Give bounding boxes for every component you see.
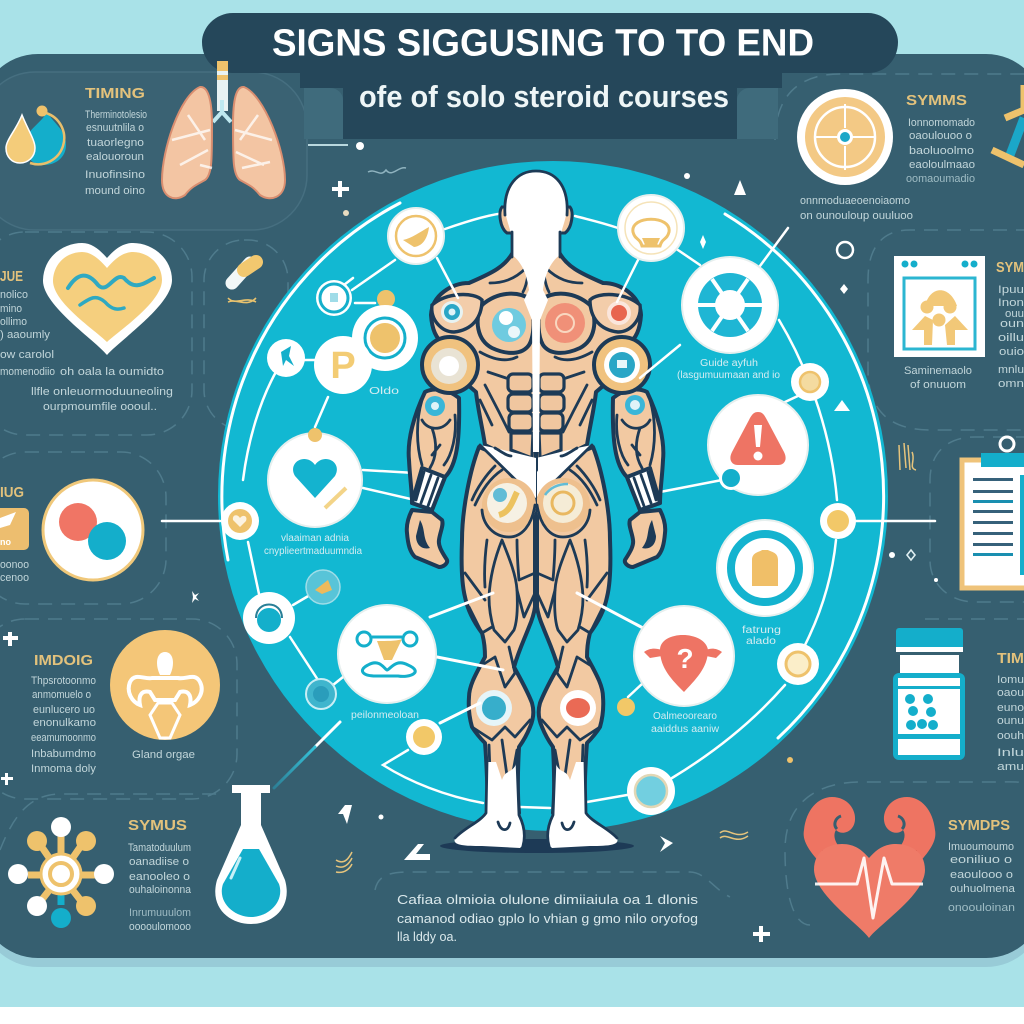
text: bottom centre: lla lddy oa.: [397, 929, 457, 944]
icon: tag: no: [0, 537, 11, 547]
text: left panel 2: ) aaoumly: [0, 329, 51, 341]
node: jacket ring: [717, 520, 813, 616]
text: bottom-left: eanooleo o: [129, 871, 190, 883]
text: bottom-right: [948, 841, 1016, 914]
label: question node: Oalmeoorearo: [653, 711, 717, 722]
node: warning: [708, 395, 808, 495]
icon: venn circles: [43, 480, 143, 580]
heading: left panel 3: IUG: [0, 484, 24, 501]
label: window card: Saminemaolo: [904, 365, 972, 377]
icon: capsule: [228, 262, 256, 303]
text: timing: esnuutnlila o: [86, 122, 144, 134]
text: left panel 4: anmomuelo o: [32, 689, 91, 701]
node: yellow ring icon: [388, 208, 444, 264]
label: window card: [904, 365, 972, 391]
node: glass lower: [306, 679, 336, 709]
text: left panel 2: momenodiio: [0, 366, 55, 378]
text: right panel 2: oillu: [998, 332, 1024, 344]
text: right panel 2: ouu: [1005, 308, 1024, 320]
node: heart circle: [268, 428, 362, 527]
node: teal figure: [267, 339, 305, 377]
title: SIGNS SIGGUSING TO TO END: [272, 22, 814, 64]
leg connectors: [430, 258, 680, 723]
label: wheel node: Guide ayfuh: [700, 358, 758, 369]
label: window card: of onuuom: [910, 379, 966, 391]
label: wheel node: (lasgumuumaan and io: [677, 370, 780, 381]
knee emblems: [476, 690, 512, 726]
text: timing: tuaorlegno: [87, 137, 144, 149]
heading: left panel 2: JUE: [0, 268, 23, 285]
outer circle highlights: [162, 203, 935, 808]
heading: bottom-left: SYMUS: [128, 817, 187, 834]
connector to flask: [274, 722, 340, 788]
text: right bottom: ounu: [997, 715, 1024, 727]
icon: node network: [8, 817, 114, 928]
text: left panel 4: enonulkamo: [33, 717, 96, 729]
node: yellow dot: [377, 290, 395, 308]
node: teal connector icon: [338, 605, 436, 703]
text: left panel 4: Inmoma doly: [31, 763, 97, 775]
text: top-right: oomaoumadio: [906, 173, 975, 185]
text: right bottom: euno: [997, 702, 1024, 714]
label: heart node: [264, 533, 362, 557]
figure shadow: [440, 839, 634, 853]
text: timing: mound oino: [85, 185, 145, 197]
label: question node: aaiddus aaniw: [651, 724, 720, 735]
node: teal head icon: [243, 592, 295, 644]
decorative sparkles: [1, 173, 938, 942]
icon: yellow heart: [43, 243, 172, 355]
text: bottom-right: eaoulooo o: [950, 869, 1013, 881]
text: top-right: baoluoolmo: [909, 145, 974, 157]
icon: lungs: [162, 61, 285, 198]
label: heart node: cnyplieertmaduumndia: [264, 546, 362, 557]
text: right bottom: amu: [997, 761, 1024, 773]
text: top-right: Ionnomomado: [908, 117, 975, 129]
text: right bottom: Iomu: [997, 674, 1024, 686]
label: jacket node: fatrung: [742, 625, 781, 636]
icon: tag: [0, 508, 29, 550]
text: right panel 2: ouio: [999, 346, 1024, 358]
icon: pill bottle: [893, 628, 965, 760]
text: right panel 2: Inon: [998, 297, 1024, 309]
label: wheel node: [677, 358, 780, 381]
ears: [500, 207, 572, 233]
label: connector node: peilonmeoloan: [351, 710, 419, 721]
node: small teal ring: [316, 280, 352, 316]
text: bottom-left: oanadiise o: [129, 856, 189, 868]
text: right bottom: oouh: [997, 730, 1024, 742]
text: left panel 2: nolico: [0, 289, 28, 301]
text: bottom-right: onoouloinan: [948, 902, 1015, 914]
text: right bottom: [997, 674, 1024, 773]
dot: [356, 142, 364, 150]
label: question node: [651, 711, 720, 735]
shoulder and arm emblems: [607, 301, 631, 325]
node: yellow lower: [406, 719, 442, 755]
icon: coral heart with horns: [804, 797, 935, 938]
text: right panel 2: oun: [1000, 318, 1024, 330]
subtitle: ofe of solo steroid courses: [359, 79, 729, 114]
text: bottom-left: Tamatoduulum: [128, 842, 191, 854]
heading: right bottom: TIM: [997, 650, 1024, 667]
text: bottom centre: Cafiaa olmioia olulone dimiiaiula oa 1 dlonis: [397, 892, 699, 907]
text: bottom-left: [128, 842, 192, 933]
text: bottom-right: eoniliuo o: [950, 854, 1012, 866]
text: left panel 4: Inbabumdmo: [31, 748, 96, 760]
icon: drops: [6, 106, 66, 165]
heading: left panel 4: IMDOIG: [34, 652, 93, 669]
text: bottom-left: ooooulomooo: [129, 921, 191, 933]
label: jacket node: alado: [746, 636, 777, 647]
text: bottom-right: Imuoumoumo: [948, 841, 1014, 853]
text: left panel 2: llfle onleuormoduuneoling: [31, 386, 173, 398]
body figure: [407, 170, 665, 848]
text: timing: Inuofinsino: [85, 169, 145, 181]
node: teal ring with yellow centre: [352, 305, 418, 371]
text: left panel 3: [0, 559, 29, 584]
node: glass badge: [306, 570, 340, 604]
text: top-right: eaoloulmaao: [909, 159, 975, 171]
node: yellow P: [314, 336, 372, 394]
text: left panel 4: eunlucero uo: [33, 704, 95, 716]
text: right panel 2: Ipuu: [998, 284, 1024, 296]
chest emblems: [545, 303, 585, 343]
icon: muscle circle: [110, 630, 220, 740]
node: yellow P: P: [330, 345, 356, 387]
head and neck: [505, 170, 567, 452]
text: left panel 2: oh oala la oumidto: [60, 366, 164, 378]
text: right panel 2: omn: [998, 378, 1024, 390]
heading: bottom-right: SYMDPS: [948, 817, 1010, 834]
text: left panel 2: ourpmoumfile oooul..: [43, 401, 157, 413]
text: bottom-left: Inrumuuulom: [129, 907, 191, 919]
node: question pin: ?: [676, 643, 694, 674]
text: left panel 2: ollimo: [0, 316, 27, 328]
text: timing: [85, 109, 147, 197]
text: bottom-left: ouhaloinonna: [129, 884, 192, 896]
label: muscle circle: Gland orgae: [132, 749, 195, 761]
node: ring lower right: [777, 643, 819, 685]
text: top-right: [906, 117, 975, 185]
text: bottom centre: [397, 892, 699, 944]
text: bottom-right: ouhuolmena: [950, 883, 1016, 895]
icon: clipboard: [962, 437, 1024, 588]
text: left panel 3: cenoo: [0, 572, 29, 584]
text: left panel 4: Thpsrotoonmo: [31, 675, 96, 687]
title banner: [202, 13, 898, 139]
icon: flask: [215, 785, 287, 924]
text: right panel 2: mnlu: [998, 364, 1024, 376]
label: jacket node: [742, 625, 781, 647]
icon: gauge circle: [797, 89, 893, 185]
icon: small ring: [837, 242, 853, 258]
text: left panel 2: ow carolol: [0, 349, 54, 361]
text: left panel 4: eeamumoonmo: [31, 732, 96, 744]
heading: top-right: SYMMS: [906, 92, 967, 109]
text: left panel 2: mino: [0, 303, 22, 315]
text: top-right: oaoulouoo o: [909, 130, 972, 142]
hip emblems: [487, 483, 527, 523]
text: bottom centre: camanod odiao gplo lo vhian g gmo nilo oryofog: [397, 911, 698, 926]
heading: timing: TIMING: [85, 85, 145, 102]
node: globe: [627, 767, 675, 815]
node: yellow ring right: [791, 363, 829, 401]
text: right bottom: Inlu: [997, 747, 1024, 759]
node: yellow right: [820, 503, 856, 539]
text: under gauge: [800, 195, 913, 222]
icon: window card: [894, 256, 985, 357]
text: under gauge: on ounouloup ouuluoo: [800, 210, 913, 222]
text: timing: ealouoroun: [86, 151, 144, 163]
text: left panel 3: oonoo: [0, 559, 29, 571]
divider: [308, 144, 348, 146]
text: left panel 4: [31, 675, 97, 775]
text: left panel 2: [0, 289, 173, 413]
node: question pin: [617, 606, 734, 716]
text: right panel 2: [998, 284, 1024, 390]
text: right bottom: oaou: [997, 687, 1024, 699]
label: heart node: vlaaiman adnia: [281, 533, 349, 544]
central teal circle: [218, 161, 888, 831]
decorative squiggles: [336, 168, 916, 872]
node: wheel icon: [682, 257, 778, 353]
label: node: Oldo: [369, 386, 400, 397]
text: under gauge: onnmoduaeoenoiaomo: [800, 195, 910, 207]
banner side tabs: [304, 88, 778, 139]
node: skull icon: [618, 195, 684, 261]
icon: clipped figure: [992, 85, 1024, 165]
node: small yellow: [221, 502, 259, 540]
text: timing: Therminotolesio: [85, 109, 147, 121]
